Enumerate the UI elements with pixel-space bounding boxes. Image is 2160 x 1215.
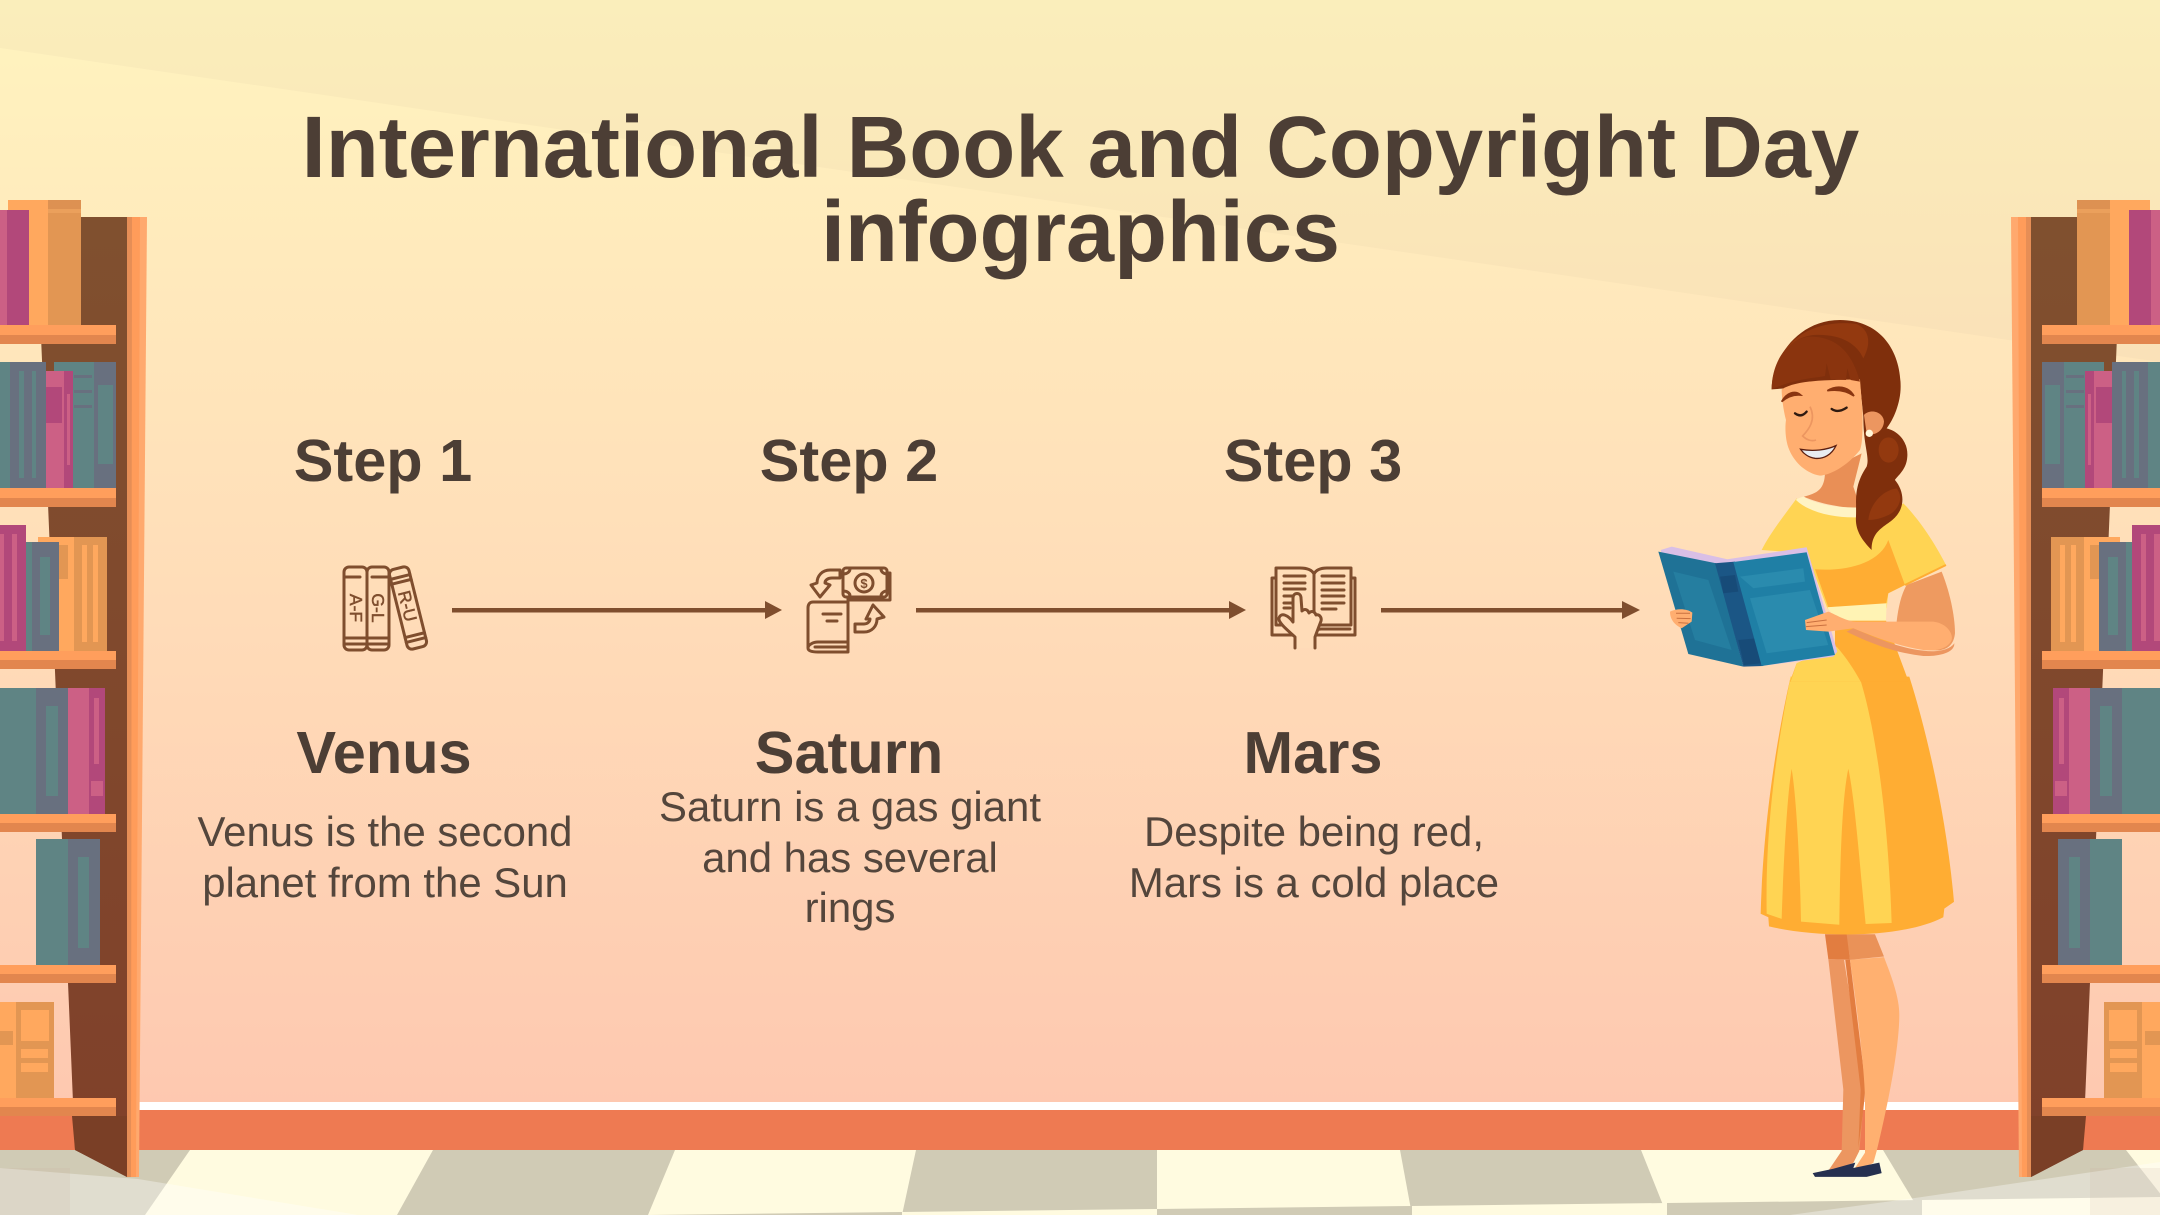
shelf row 5 books [36,839,100,965]
step 2 column [659,427,1246,931]
step 3 heading: Step 3 [1224,427,1402,494]
mars description [1129,808,1499,906]
open book [1658,547,1837,667]
saturn heading: Saturn [755,719,943,786]
illustration: woman reading a book [1658,320,1955,1177]
hair and ponytail [1772,320,1907,550]
title [302,99,1859,280]
checkered floor [0,1150,2160,1215]
icon: library books: G-L [368,593,388,623]
mars description: Despite being red, [1144,808,1484,855]
icon: book and money exchange: $ [860,576,868,591]
dress bodice [1762,498,1946,608]
fringe [1772,337,1860,389]
title: infographics [821,184,1340,280]
venus description [198,808,572,906]
shelf row 6 books [0,1002,54,1098]
icon: hand reading book [1272,568,1355,648]
face [1782,379,1863,476]
shelf boards [0,325,116,1116]
arrow 2 [916,601,1246,619]
saturn description: Saturn is a gas giant [659,783,1041,830]
left bookshelf [0,200,147,1177]
shelf row 2 books [0,362,116,488]
venus description: Venus is the second [198,808,572,855]
collar [1796,497,1861,517]
forearm and right hand [1805,612,1954,656]
right bookshelf [2011,200,2160,1177]
title: International Book and Copyright Day [302,99,1859,196]
shelf row 4 books [0,688,105,814]
shelf row 3 books [0,525,107,651]
yellow skirt [1761,677,1954,935]
upper arm [1897,572,1955,650]
baseboard [0,1102,2160,1150]
belt [1827,603,1887,621]
step 1 heading: Step 1 [294,427,472,494]
icon: library books [344,566,428,650]
venus heading: Venus [296,719,472,786]
ear and earring [1864,412,1884,434]
neck [1804,453,1862,508]
shelf row 1 books [0,200,81,325]
icon: book and money exchange [808,568,890,652]
legs and shoes [1813,934,1899,1177]
icon: library books: A-F [346,594,366,622]
step 3 column [1129,427,1640,906]
venus description: planet from the Sun [202,859,568,906]
saturn description: rings [805,884,895,931]
arrow 3 [1381,601,1640,619]
step 1 column [198,427,782,906]
left hand [1670,609,1692,628]
saturn description [659,783,1041,931]
icon: library books: R-U [394,589,421,624]
waist and skirt top [1790,621,1909,682]
step 2 heading: Step 2 [760,427,938,494]
mars heading: Mars [1244,719,1382,786]
arrow 1 [452,601,782,619]
torso, arm, head and book [1658,320,1955,682]
mars description: Mars is a cold place [1129,859,1499,906]
saturn description: and has several [702,834,998,881]
